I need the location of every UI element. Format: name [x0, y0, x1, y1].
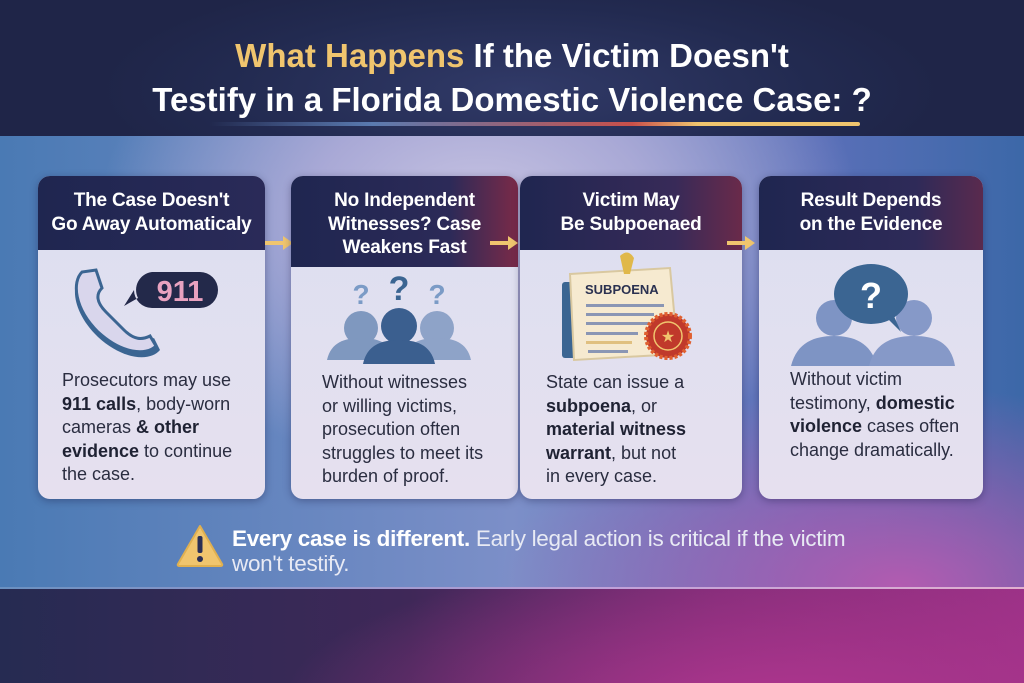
heading	[759, 176, 983, 250]
title: Testify in a Florida Domestic Violence Case: ?	[152, 81, 872, 118]
icon: people with questions: ?	[428, 279, 446, 310]
text: the case.	[62, 464, 135, 484]
icon: phone 911: 911	[157, 276, 203, 308]
text	[62, 370, 232, 484]
arrow	[727, 236, 755, 250]
callout	[176, 525, 845, 576]
heading: Go Away Automaticaly	[51, 214, 252, 234]
heading	[291, 176, 518, 267]
panel: result depends	[759, 176, 983, 499]
heading: Be Subpoenaed	[560, 214, 701, 234]
icon: subpoena document: SUBPOENA	[585, 282, 659, 297]
text: in every case.	[546, 466, 657, 486]
text	[790, 369, 959, 460]
heading	[520, 176, 742, 250]
title	[152, 37, 872, 118]
icon: subpoena document: ★	[661, 329, 675, 346]
arrow	[490, 236, 518, 250]
text: cameras & other	[62, 417, 199, 437]
text: violence cases often	[790, 416, 959, 436]
panel: case doesn't go away	[38, 176, 265, 499]
text: or willing victims,	[322, 396, 457, 416]
panel: subpoena	[520, 176, 742, 499]
icon: people with questions: ?	[352, 279, 370, 310]
arrow	[265, 236, 291, 250]
text: burden of proof.	[322, 466, 449, 486]
background	[0, 136, 1024, 589]
text: Prosecutors may use	[62, 370, 231, 390]
header band	[0, 0, 1024, 136]
heading: Victim May	[583, 190, 679, 211]
heading: Weakens Fast	[342, 237, 466, 258]
text: subpoena, or	[546, 396, 657, 416]
heading	[38, 176, 265, 250]
heading: The Case Doesn't	[74, 190, 229, 211]
text: testimony, domestic	[790, 392, 955, 412]
text	[322, 372, 483, 486]
text: Every case is different. Early legal action is critical if the victim	[232, 526, 845, 551]
text: warrant, but not	[546, 442, 676, 462]
text: material witness	[546, 419, 686, 439]
text: State can issue a	[546, 372, 684, 392]
text: change dramatically.	[790, 440, 954, 460]
heading: Witnesses? Case	[328, 214, 481, 234]
heading: on the Evidence	[800, 214, 942, 234]
text: Without victim	[790, 369, 902, 389]
text: evidence to continue	[62, 440, 232, 460]
divider	[0, 587, 1024, 589]
heading: No Independent	[334, 190, 475, 211]
icon: subpoena document	[562, 252, 692, 361]
icon: two people with speech bubble: ?	[860, 275, 882, 316]
icon: phone 911	[74, 268, 218, 358]
text: struggles to meet its	[322, 442, 483, 462]
bottom band	[0, 589, 1024, 683]
text: Without witnesses	[322, 372, 467, 392]
heading: Result Depends	[801, 190, 941, 211]
text: prosecution often	[322, 419, 460, 439]
panel: no independent witnesses	[291, 176, 518, 499]
icon: people with questions	[327, 276, 471, 364]
icon: warning	[176, 525, 224, 567]
text: won't testify.	[232, 551, 349, 576]
title underline	[210, 122, 860, 126]
text: 911 calls, body-worn	[62, 394, 230, 414]
text	[546, 372, 686, 486]
icon: two people with speech bubble	[791, 264, 955, 366]
text	[232, 526, 845, 576]
title: What Happens If the Victim Doesn't	[235, 37, 789, 74]
